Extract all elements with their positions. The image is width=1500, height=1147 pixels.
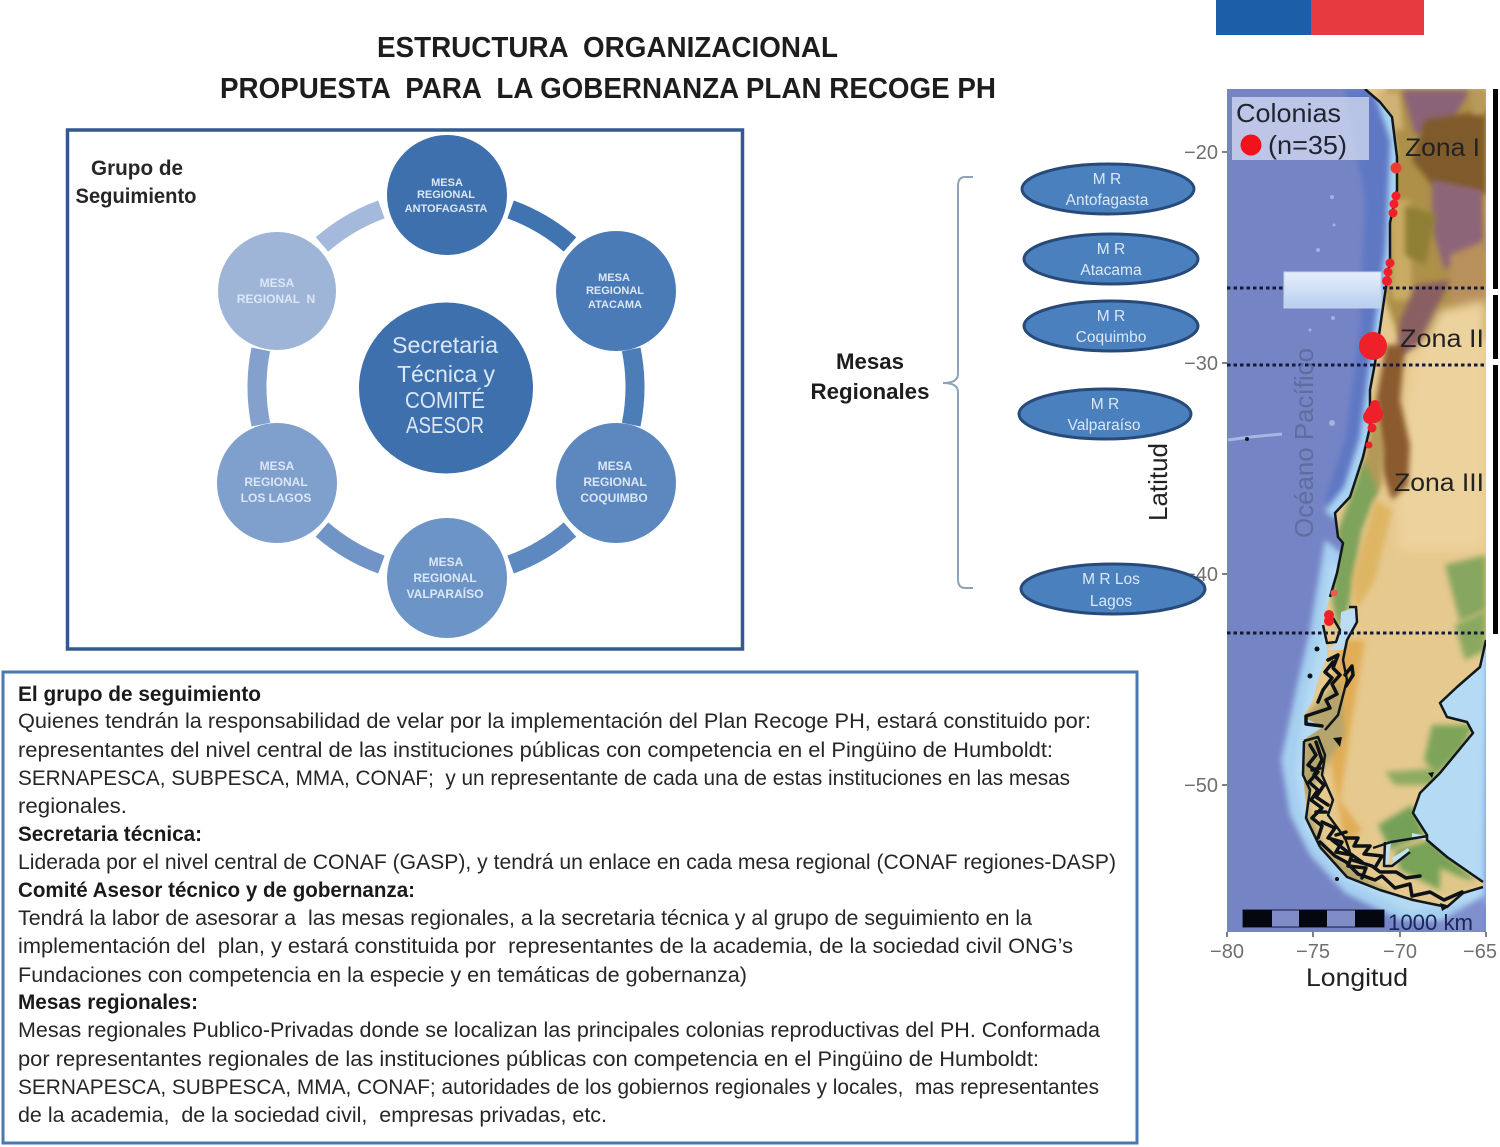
zone labels: Zona II: [1400, 325, 1484, 353]
ellipse: M R Valparaiso: M R: [1091, 396, 1119, 413]
circle: mesa n: [218, 232, 336, 350]
text: comite asesor: Fundaciones con competencia en la especie y en temáticas de gobernanza): [18, 964, 747, 987]
circle: mesa coquimbo: COQUIMBO: [580, 491, 648, 505]
ellipse: M R Atacama: M R: [1097, 241, 1125, 258]
ring connectors: [257, 209, 635, 565]
text: comite asesor: [18, 879, 1073, 987]
circle: mesa valparaiso: [387, 518, 507, 638]
text: comite asesor: Comité Asesor técnico y de gobernanza:: [18, 879, 415, 902]
circle: mesa valparaiso: VALPARAÍSO: [407, 586, 483, 601]
ellipse: M R Valparaiso: Valparaíso: [1068, 417, 1140, 434]
circle: secretaria tecnica: COMITÉ: [405, 387, 485, 413]
y axis: −20: [1184, 142, 1218, 164]
ellipse: M R Los Lagos: M R Los: [1082, 571, 1140, 588]
circle: mesa valparaiso: REGIONAL: [413, 571, 477, 585]
ellipse: M R Los Lagos: Lagos: [1090, 593, 1132, 610]
text: secretaria tecnica: Liderada por el nivel central de CONAF (GASP), y tendrá un enlace en cada mesa regional (CONAF regiones-DASP): [18, 851, 1116, 874]
zone bars: [1493, 89, 1498, 634]
heading: grupo de seguimiento: Grupo de: [91, 157, 183, 180]
ellipse: M R Coquimbo: [1024, 301, 1198, 351]
ellipse: M R Coquimbo: M R: [1097, 308, 1125, 325]
circle: mesa antofagasta: ANTOFAGASTA: [405, 203, 487, 215]
small islands: [1308, 646, 1450, 911]
dotted latitude lines: [1227, 288, 1486, 633]
legend: colonias: [1232, 97, 1369, 160]
circle: mesa atacama: REGIONAL: [586, 285, 644, 297]
ocean background: [1227, 89, 1486, 932]
x axis: Longitud: [1306, 964, 1408, 992]
label: mesas regionales: Regionales: [810, 379, 930, 404]
circle: mesa los lagos: [217, 423, 337, 543]
text: secretaria tecnica: Secretaria técnica:: [18, 823, 202, 846]
circle: mesa los lagos: MESA: [260, 459, 295, 473]
circle: mesa n: REGIONAL N: [237, 292, 315, 306]
heading: grupo de seguimiento: [76, 157, 196, 208]
circle: mesa valparaiso: MESA: [429, 555, 464, 569]
circle: secretaria tecnica: Técnica y: [397, 361, 495, 387]
y axis: Latitud: [1143, 443, 1173, 521]
circle: mesa n: MESA: [260, 276, 295, 290]
ellipse: M R Valparaiso: [1019, 389, 1191, 439]
circle: secretaria tecnica: Secretaria: [392, 332, 498, 358]
x axis: −65: [1463, 941, 1497, 963]
zone labels: Zona I: [1405, 134, 1480, 162]
legend: colonias: Colonias: [1236, 98, 1341, 128]
circle: secretaria tecnica: [359, 302, 533, 474]
text: mesas regionales: de la academia, de la sociedad civil, empresas privadas, etc.: [18, 1104, 607, 1127]
text: secretaria tecnica: [18, 823, 1116, 874]
circle: mesa atacama: MESA: [598, 272, 630, 284]
title: [220, 32, 996, 105]
ellipse: M R Atacama: Atacama: [1080, 262, 1142, 279]
ellipse: M R Antofagasta: M R: [1093, 171, 1121, 188]
ellipse: M R Antofagasta: Antofagasta: [1066, 192, 1149, 209]
flag: [1216, 0, 1424, 35]
x axis: [1210, 932, 1497, 992]
circle: mesa antofagasta: [387, 135, 507, 255]
ocean label: Océano Pacífico: [1289, 348, 1319, 538]
text: grupo de seguimiento: representantes del nivel central de las instituciones públicas con competencia en el Pingüino de Humboldt:: [18, 739, 1053, 762]
scale bar: 1000 km: [1388, 910, 1473, 935]
ellipse: M R Coquimbo: Coquimbo: [1076, 329, 1146, 346]
circle: mesa coquimbo: REGIONAL: [583, 475, 647, 489]
y axis: [1143, 142, 1227, 797]
circle: mesa los lagos: REGIONAL: [244, 475, 308, 489]
map: [1143, 89, 1498, 992]
colony markers: [1324, 162, 1402, 626]
text: mesas regionales: SERNAPESCA, SUBPESCA, MMA, CONAF; autoridades de los gobiernos regionales y locales, mas representantes: [18, 1076, 1099, 1099]
y axis: −30: [1184, 353, 1218, 375]
bracket: [943, 177, 973, 588]
ellipse: M R Antofagasta: [1022, 164, 1194, 214]
circle: secretaria tecnica: ASESOR: [406, 412, 484, 438]
fjords and archipelago: [1306, 655, 1462, 900]
x axis: −75: [1296, 941, 1330, 963]
circle: mesa los lagos: LOS LAGOS: [241, 491, 311, 505]
text: grupo de seguimiento: El grupo de seguimiento: [18, 683, 261, 706]
circle: mesa coquimbo: MESA: [598, 459, 633, 473]
x axis: −80: [1210, 941, 1244, 963]
coastline: [1303, 89, 1486, 907]
circle: mesa antofagasta: REGIONAL: [417, 189, 475, 201]
circle: mesa antofagasta: MESA: [431, 177, 463, 189]
panel: description text: [3, 672, 1137, 1143]
text: mesas regionales: [18, 991, 1100, 1127]
ellipse: M R Los Lagos: [1021, 564, 1205, 614]
text: comite asesor: Tendrá la labor de asesorar a las mesas regionales, a la secretaria técnica y al grupo de seguimiento en la: [18, 907, 1032, 930]
x axis: −70: [1383, 941, 1417, 963]
text: mesas regionales: Mesas regionales Publico-Privadas donde se localizan las principales colonias reproductivas del PH. Conformada: [18, 1019, 1100, 1042]
text: mesas regionales: Mesas regionales:: [18, 991, 198, 1014]
circle: mesa atacama: ATACAMA: [588, 299, 642, 311]
title: PROPUESTA PARA LA GOBERNANZA PLAN RECOGE PH: [220, 73, 996, 105]
scale bar: [1242, 910, 1472, 930]
tick label: -40: −40: [1184, 564, 1218, 586]
island dot: [1245, 437, 1249, 441]
land relief: [1303, 89, 1486, 905]
pale rectangle: [1284, 272, 1381, 308]
legend: colonias: (n=35): [1268, 130, 1347, 160]
zone labels: Zona III: [1394, 469, 1484, 497]
heading: grupo de seguimiento: Seguimiento: [76, 185, 196, 208]
title: ESTRUCTURA ORGANIZACIONAL: [377, 32, 838, 64]
y axis: −50: [1184, 775, 1218, 797]
text: comite asesor: implementación del plan, y estará constituida por representantes de la academia, de la sociedad civil ONG’s: [18, 935, 1073, 958]
text: grupo de seguimiento: SERNAPESCA, SUBPESCA, MMA, CONAF; y un representante de cada una de estas instituciones en las mesas: [18, 767, 1070, 790]
text: mesas regionales: por representantes regionales de las instituciones públicas con competencia en el Pingüino de Humboldt:: [18, 1048, 1039, 1071]
ellipse: M R Atacama: [1024, 234, 1198, 284]
text: grupo de seguimiento: [18, 683, 1091, 818]
label: mesas regionales: Mesas: [836, 349, 904, 374]
zone labels: [1394, 134, 1484, 497]
label: mesas regionales: [810, 349, 930, 404]
circle: mesa coquimbo: [556, 423, 676, 543]
panel: grupo de seguimiento diagram: [68, 130, 742, 649]
text: grupo de seguimiento: regionales.: [18, 795, 127, 818]
text: grupo de seguimiento: Quienes tendrán la responsabilidad de velar por la implementación del Plan Recoge PH, estará constituido por:: [18, 710, 1091, 733]
circle: mesa atacama: [556, 231, 676, 351]
